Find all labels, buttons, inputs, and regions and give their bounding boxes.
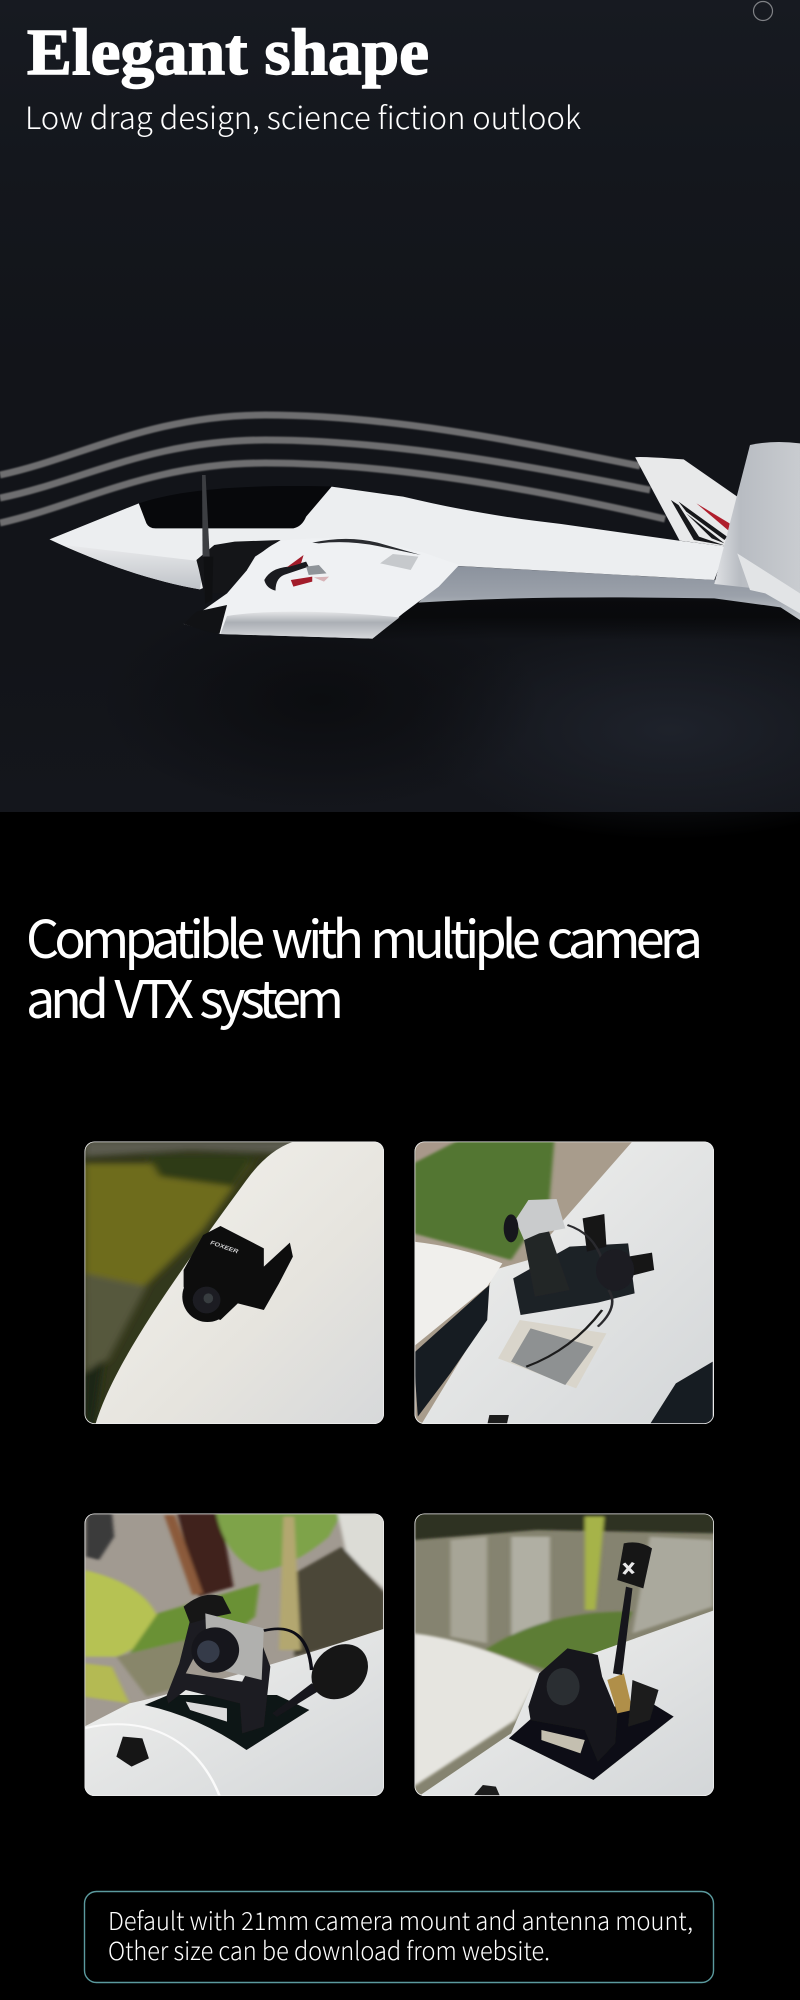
rudder fin — [635, 457, 737, 547]
small circle marker — [754, 2, 772, 20]
rear knob — [184, 1595, 231, 1623]
title: Elegant shape — [27, 16, 429, 89]
SMA connector — [607, 1673, 659, 1727]
motor — [196, 540, 281, 593]
mount frame — [166, 1615, 270, 1733]
tail stripes — [671, 500, 727, 545]
wing leading strip — [220, 612, 399, 639]
airplane — [49, 442, 800, 639]
subtitle: Low drag design, science fiction outlook — [25, 93, 581, 138]
camera lens — [191, 1627, 239, 1673]
fuselage top — [49, 487, 727, 589]
wing tip — [184, 605, 227, 634]
hatch with VTX — [498, 1310, 606, 1388]
dark fuselage stripes — [413, 1285, 713, 1424]
camera — [528, 1648, 617, 1762]
airflow lines — [0, 415, 665, 523]
photo: camera with gimbal and VTX — [411, 1140, 717, 1427]
canopy — [139, 486, 337, 528]
section heading: Compatible with multiple camera — [26, 898, 703, 973]
photo: silver camera on canopy mount — [82, 1512, 387, 1798]
hero panel: elegant shape — [0, 0, 800, 840]
base plate — [509, 1703, 674, 1780]
rear hull — [418, 566, 800, 620]
propeller — [202, 475, 213, 604]
foam cut-outs — [186, 1702, 227, 1722]
nose underside — [64, 545, 204, 589]
photo: Foxeer camera on foam nose — [82, 1140, 390, 1427]
wing slot — [312, 539, 421, 555]
photo: Foxeer camera on foam nose: FOXEER — [209, 1240, 240, 1255]
wing logo — [264, 555, 329, 591]
vertical tail — [714, 442, 800, 593]
tail red stripe — [696, 503, 730, 531]
lens — [182, 1286, 220, 1322]
screw — [116, 1737, 149, 1767]
wing — [184, 538, 459, 639]
callout: default mounts: Other size can be download from website. — [108, 1932, 550, 1968]
base plate — [145, 1695, 309, 1750]
mount — [513, 1214, 654, 1315]
callout: default mounts — [84, 1892, 714, 1982]
section heading — [26, 898, 703, 1033]
wing mark — [380, 554, 418, 570]
antenna — [613, 1542, 652, 1675]
callout: default mounts: Default with 21mm camera mount and antenna mount, — [108, 1902, 693, 1938]
camera silver — [504, 1199, 565, 1242]
cable and lens cap — [264, 1629, 378, 1717]
photo: camera with antenna mount — [411, 1512, 717, 1798]
camera body — [184, 1226, 293, 1320]
section heading: and VTX system — [26, 958, 344, 1033]
hero background light and shadow — [100, 590, 800, 840]
bottom screw — [474, 1785, 500, 1796]
camera silver — [205, 1613, 264, 1680]
tail lower plate — [737, 553, 800, 613]
